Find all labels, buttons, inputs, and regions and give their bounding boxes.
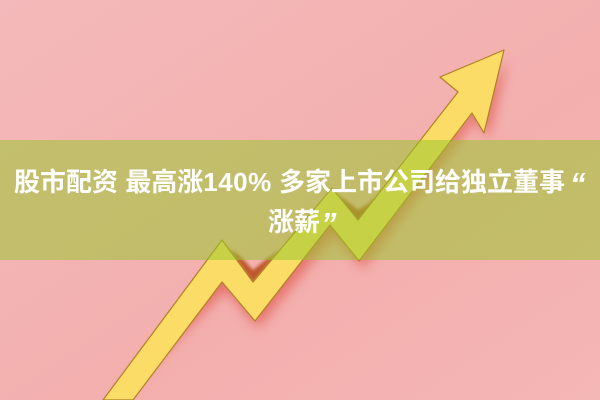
title: ” <box>321 206 336 241</box>
title: 股市配资 最高涨140% 多家上市公司给独立董事 <box>14 167 565 197</box>
title: 涨薪 <box>268 207 320 237</box>
upper valley shadows <box>228 192 382 283</box>
title: “ <box>570 166 586 201</box>
arrow: yellow zigzag <box>103 50 504 400</box>
title <box>14 166 586 241</box>
translucent title band <box>0 140 600 260</box>
arrow soft shadow <box>112 60 507 400</box>
